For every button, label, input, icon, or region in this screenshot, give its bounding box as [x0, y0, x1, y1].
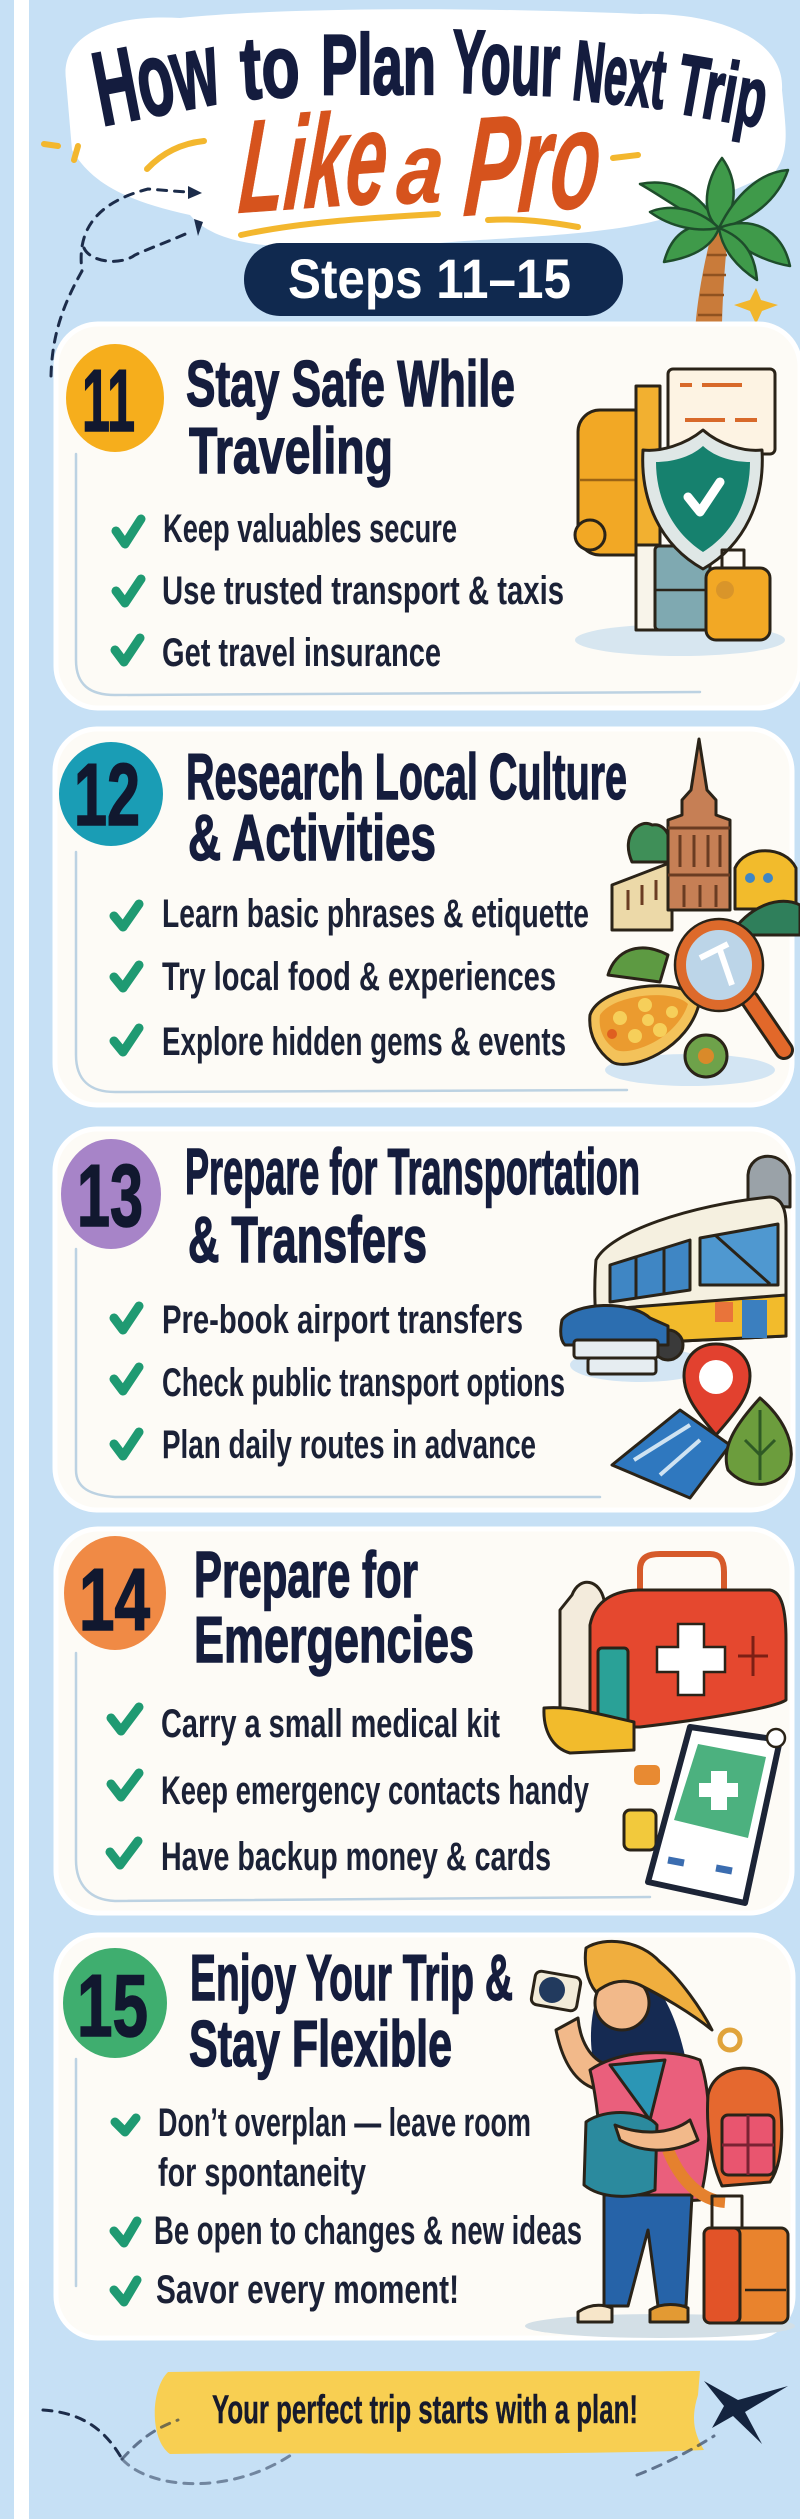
heading 15: Stay Flexible	[189, 2007, 452, 2080]
heading 15	[189, 1941, 513, 2080]
number badge 15: 15	[77, 1956, 148, 2055]
heading 13: & Transfers	[188, 1203, 427, 1276]
title banner	[44, 9, 786, 247]
panel: step 15	[56, 1935, 795, 2338]
checklist 13: Pre-book airport transfers	[162, 1298, 523, 1342]
title line two: Like a Pro: a	[393, 111, 449, 226]
heading 11: Traveling	[189, 414, 393, 487]
icon: landmark, food and magnifier	[590, 739, 800, 1086]
icon: airplane	[704, 2381, 788, 2444]
dashed trail	[43, 2410, 714, 2484]
title line one	[84, 10, 775, 149]
number badge 13: 13	[77, 1146, 143, 1245]
number badge 11	[66, 344, 164, 452]
title blob	[66, 9, 786, 247]
checklist 15: Savor every moment!	[156, 2268, 459, 2312]
checklist 14: Carry a small medical kit	[161, 1702, 500, 1746]
checklist 11: Keep valuables secure	[163, 507, 457, 551]
icon: luggage, ticket and shield	[575, 369, 785, 656]
checklist 13: Check public transport options	[162, 1361, 565, 1405]
heading 14	[194, 1538, 474, 1676]
panel: step 12	[55, 729, 800, 1105]
title line one: Next	[569, 23, 670, 128]
number badge 13	[61, 1139, 161, 1249]
checklist 14: Keep emergency contacts handy	[161, 1769, 590, 1813]
icon: bus, car, pin and map	[561, 1156, 791, 1498]
number badge 11: 11	[82, 351, 135, 450]
panel: step 14	[56, 1529, 792, 1913]
heading 13	[185, 1135, 640, 1276]
call to action banner	[155, 2371, 704, 2454]
icon: sun star	[734, 288, 778, 324]
checklist 15: Don’t overplan — leave room	[158, 2101, 531, 2145]
icon: traveler with camera and suitcase	[525, 1941, 795, 2338]
icon: first aid kit and phone	[544, 1554, 786, 1903]
title line two: Like a Pro: Like	[235, 83, 393, 242]
heading 11: Stay Safe While	[186, 347, 515, 420]
title line one: to	[238, 16, 302, 118]
checklist 14: Have backup money & cards	[161, 1835, 551, 1879]
icon: palm tree	[640, 158, 790, 334]
panel: step 13	[55, 1129, 793, 1510]
checklist 12: Explore hidden gems & events	[162, 1020, 566, 1064]
dashed flight path	[51, 186, 203, 376]
number badge 14	[64, 1536, 166, 1650]
checklist 13	[114, 1298, 565, 1467]
checklist 15: for spontaneity	[158, 2151, 367, 2195]
heading 14: Prepare for	[194, 1538, 418, 1611]
heading 12: & Activities	[188, 801, 436, 874]
number badge 12: 12	[74, 745, 140, 844]
heading 15: Enjoy Your Trip &	[190, 1941, 513, 2014]
heading 14: Emergencies	[194, 1603, 474, 1676]
title line two: Like a Pro: Pro	[460, 79, 607, 246]
checklist 15	[114, 2101, 582, 2312]
panel: step 11	[56, 324, 800, 708]
checklist 12: Try local food & experiences	[162, 955, 556, 999]
title line one: Your	[450, 12, 562, 116]
checklist 14	[110, 1702, 590, 1879]
steps pill: Steps 11–15	[288, 247, 571, 310]
checklist 11: Use trusted transport & taxis	[162, 569, 564, 613]
checklist 12: Learn basic phrases & etiquette	[162, 892, 589, 936]
yellow swooshes	[44, 141, 638, 235]
heading 11	[186, 347, 515, 487]
checklist 15: Be open to changes & new ideas	[154, 2209, 582, 2253]
checklist 13: Plan daily routes in advance	[162, 1423, 536, 1467]
title line one: Plan	[321, 18, 436, 113]
checklist 12	[114, 892, 589, 1064]
number badge 14: 14	[79, 1550, 150, 1649]
checklist 11	[115, 507, 564, 675]
checklist 11: Get travel insurance	[162, 631, 441, 675]
heading 12	[186, 740, 627, 874]
